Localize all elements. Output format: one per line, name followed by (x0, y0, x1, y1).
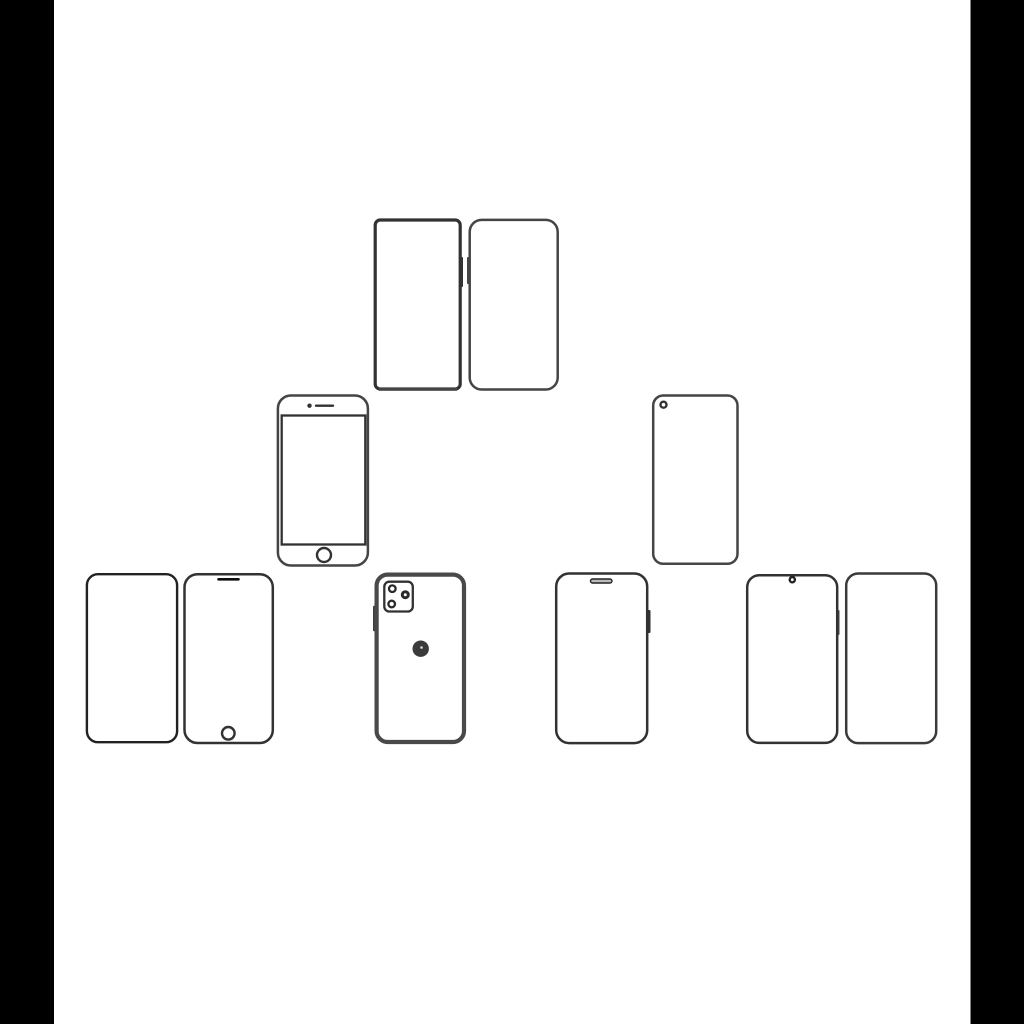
phone: bottom row plain front (87, 574, 177, 742)
camera module (384, 582, 413, 612)
phone: top left, thick bezel front (375, 220, 463, 389)
phone: front with pill notch (556, 574, 650, 743)
phone: classic with screen, speaker and home button (278, 396, 368, 566)
phone: punch-hole camera top left (653, 396, 738, 564)
phone: top right, plain front (467, 220, 558, 390)
phone: bottom row with speaker and home button (184, 574, 273, 743)
rear centre logo dot (412, 640, 429, 657)
phone: front with centre punch hole (747, 575, 840, 743)
phone: bottom right plain front (846, 574, 936, 743)
phone: rear view with triple camera (373, 575, 464, 742)
